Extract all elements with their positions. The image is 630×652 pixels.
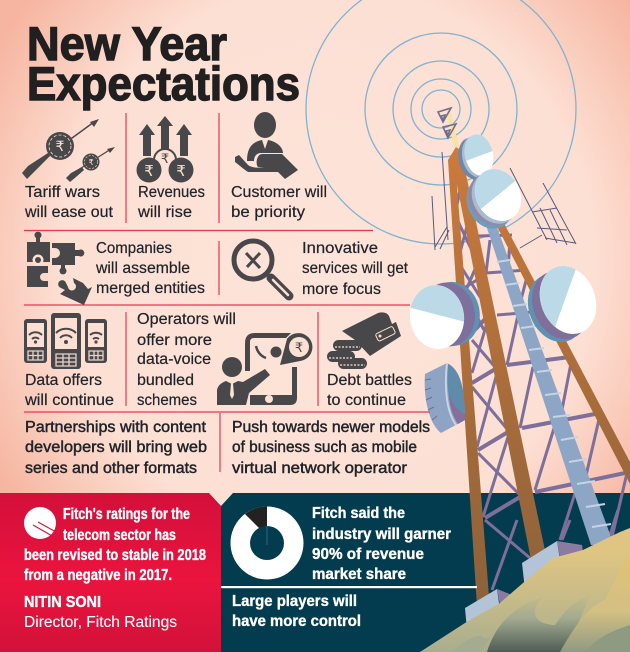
mast antennas xyxy=(438,108,456,138)
text block: large players: have more control xyxy=(232,613,361,630)
icon: wallet and coins xyxy=(327,312,401,369)
text block: second row: services will get xyxy=(302,260,409,277)
feed strip stripes xyxy=(497,260,611,527)
icon: revenues rising: ₹ xyxy=(161,152,169,167)
text block: second row: more focus xyxy=(302,281,381,298)
text block: third row xyxy=(24,311,412,409)
text block: second row: Innovative xyxy=(302,240,378,257)
text block: third row: offer more xyxy=(137,332,212,349)
concrete block left xyxy=(465,589,500,630)
text block: third row: to continue xyxy=(327,392,406,409)
hill gold ridge xyxy=(560,555,630,652)
text block: third row: schemes xyxy=(137,392,197,409)
panel: teal market share background xyxy=(221,493,630,652)
lattice xyxy=(455,170,630,590)
text block: third row: will continue xyxy=(24,392,114,409)
dish: right xyxy=(528,266,596,342)
hill shadow xyxy=(487,595,590,652)
text block: third row: data-voice xyxy=(137,351,211,368)
coin stack xyxy=(327,340,367,369)
icon: revenues rising xyxy=(136,116,194,182)
text block: second row xyxy=(95,240,409,298)
text block: large players xyxy=(232,593,361,630)
text block: top row: Tariff wars xyxy=(25,184,100,201)
title xyxy=(27,17,300,110)
title: New Year xyxy=(27,17,227,70)
text block: fourth row: Push towards newer models xyxy=(232,419,430,436)
text block: fourth row: of business such as mobile xyxy=(232,439,417,456)
tower right leg xyxy=(456,147,630,484)
concrete block right top xyxy=(557,541,583,558)
text block: top row xyxy=(24,184,327,221)
text block: top row: will rise xyxy=(137,204,192,221)
text block: Fitch quote: telecom sector has xyxy=(63,527,176,544)
text block: top row: be priority xyxy=(231,204,305,221)
text block: fourth row xyxy=(25,419,430,477)
text block: second row: Companies xyxy=(96,240,172,257)
text block: Fitch quote: NITIN SONI xyxy=(24,594,101,611)
icon: magnifier with tools xyxy=(234,241,289,296)
icon: phones with wifi xyxy=(24,313,107,369)
title: Expectations xyxy=(27,57,300,110)
text block: Fitch quote: from a negative in 2017. xyxy=(24,567,172,584)
icon: tariff arrows and coins: ₹ xyxy=(88,158,94,167)
mast xyxy=(446,107,459,148)
dish: left xyxy=(410,282,480,349)
text block: fourth row: virtual network operator xyxy=(232,460,407,477)
text block: market share xyxy=(312,505,451,583)
text block: third row: Data offers xyxy=(25,372,102,389)
text block: market share: industry will garner xyxy=(312,526,451,543)
text block: market share: Fitch said the xyxy=(312,505,405,522)
icon: presenter with tablet xyxy=(217,333,312,405)
icon: Fitch quote disc xyxy=(24,507,56,539)
feed strip xyxy=(485,222,614,545)
icon: tariff arrows and coins: ₹ xyxy=(56,139,65,155)
icon: customer on hand xyxy=(235,112,298,179)
donut chart: revenue share xyxy=(230,506,304,580)
dish: second xyxy=(466,169,522,229)
text block: fourth row: developers will bring web xyxy=(25,439,207,456)
hill left shadow xyxy=(452,632,495,652)
text block: fourth row: series and other formats xyxy=(25,460,197,477)
tower left leg xyxy=(448,160,491,622)
mountain xyxy=(420,528,630,652)
icon: revenues rising: ₹ xyxy=(144,162,154,180)
text block: market share: 90% of revenue xyxy=(312,546,424,563)
hill xyxy=(420,528,630,652)
tower xyxy=(402,107,630,622)
dish: back cylinder xyxy=(425,363,465,433)
panel: red quote background xyxy=(0,493,221,652)
text block: third row: Operators will xyxy=(137,311,236,328)
signal rings xyxy=(306,0,576,244)
icon: tariff arrows and coins xyxy=(22,119,115,182)
text block: Fitch quote: Director, Fitch Ratings xyxy=(24,614,177,631)
text block: Fitch quote xyxy=(24,506,206,631)
text block: third row: bundled xyxy=(137,372,194,389)
text block: Fitch quote: Fitch's ratings for the xyxy=(63,506,190,523)
concrete block right xyxy=(522,541,560,590)
concrete block left top xyxy=(497,589,512,605)
text block: second row: merged entities xyxy=(96,280,205,297)
icon: puzzle pieces xyxy=(27,232,92,305)
text block: top row: Revenues xyxy=(138,184,205,201)
text block: third row: Debt battles xyxy=(327,372,412,389)
antenna nets xyxy=(432,152,576,250)
text block: second row: will assemble xyxy=(95,260,190,277)
text block: top row: will ease out xyxy=(24,204,114,221)
icon: presenter with tablet: ₹ xyxy=(295,341,303,356)
hill right shadow xyxy=(585,625,630,652)
dish: top xyxy=(458,134,494,179)
icon: revenues rising: ₹ xyxy=(176,162,186,180)
text block: large players: Large players will xyxy=(232,593,357,610)
text block: fourth row: Partnerships with content xyxy=(25,419,207,436)
text block: top row: Customer will xyxy=(231,184,327,201)
divider lines xyxy=(24,113,430,472)
tower middle leg xyxy=(448,147,547,560)
text block: Fitch quote: been revised to stable in 2018 xyxy=(24,547,206,564)
text block: market share: market share xyxy=(312,566,406,583)
white rule xyxy=(221,586,477,588)
